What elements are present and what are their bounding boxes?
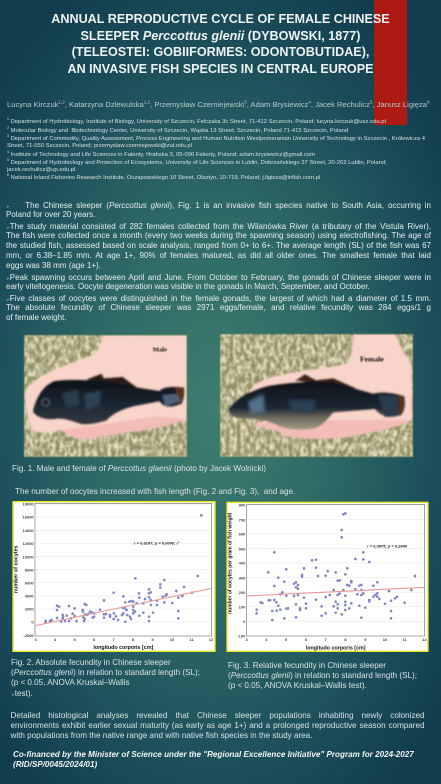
axis tick labels: -100 [237, 634, 246, 639]
conclusion text: Detailed histological analyses revealed that Chinese sleeper populations inhabiting newly colonized [10, 711, 424, 720]
chart: absolute fecundity scatter: 10 [170, 637, 175, 642]
red accent bar [374, 0, 407, 125]
funding note: Co-financed by the Minister of Science under the "Regional Excellence Initiative" Program for 2024-2027 [13, 750, 414, 759]
paragraph: spawning: ➢Peak spawning occurs between April and June. From October to February, the gonads of Chinese sleeper were in [6, 272, 431, 282]
title: (TELEOSTEI: GOBIIFORMES: ODONTOBUTIDAE), [72, 45, 369, 59]
chart: absolute fecundity scatter: 7 [113, 637, 116, 642]
caption: figure 3 [228, 661, 417, 690]
regression line [247, 587, 425, 596]
funding note [13, 750, 414, 769]
photo: male fish [23, 334, 188, 458]
chart: absolute fecundity scatter: 9 [152, 637, 155, 642]
axis tick labels: 700 [239, 517, 246, 522]
title: ANNUAL REPRODUCTIVE CYCLE OF FEMALE CHINESE [51, 12, 390, 26]
regression line [35, 588, 212, 626]
title: AN INVASIVE FISH SPECIES IN CENTRAL EUROPE [67, 62, 374, 76]
chart: relative fecundity scatter: 8 [344, 637, 347, 642]
axis tick labels: 4000 [25, 594, 34, 599]
axis titles: longitudo corporis [cm] [306, 646, 366, 652]
axis tick labels [237, 503, 246, 639]
chart: relative fecundity scatter: 11 [403, 637, 408, 642]
paragraph: oocytes [6, 294, 431, 322]
chart: relative fecundity scatter: number of oocytes per gram of fish weight [228, 512, 234, 614]
paragraph: study material: ➢The study material consisted of 282 females collected from the Wilanówka River (a tributary of the Vistula River). [6, 222, 431, 230]
axis tick labels: 8000 [25, 567, 34, 572]
affiliations: 6 National Inland Fisheries Research Institute, Oczapowskiego 10 Street, Olsztyn, 10-719, Poland; j.ligieza@infish.com.pl [7, 173, 320, 180]
chart: absolute fecundity scatter: 3 [35, 637, 38, 642]
paragraph: study material [6, 222, 431, 270]
axis tick labels: 2000 [25, 607, 34, 612]
caption: figure 3: Fig. 3. Relative fecundity in Chinese sleeper [228, 661, 386, 670]
affiliations: 2 Molecular Biology and Biotechnology Center, University of Szczecin, Wąska 13 Street, Szczecin, Poland 71-415 Szczecin, Poland [7, 126, 348, 134]
affiliations: jacek.rechulicz@up.edu.pl [7, 166, 75, 172]
caption: figure 2: (p < 0.05, ANOVA Kruskal–Wallis [11, 678, 130, 686]
photo: female fish: Female [360, 354, 384, 363]
photo: female fish [220, 333, 414, 458]
chart: relative fecundity scatter: 3 [246, 637, 249, 642]
caption: figure 1: Fig. 1. Male and female of Perccottus glaenii (photo by Jacek Wolnicki) [12, 464, 266, 473]
paragraph: oocytes: The absolute fecundity of Chinese sleeper was 2971 eggs/female, and relative fecundity was 284 eggs/1 g [6, 303, 431, 312]
axis tick labels: 600 [239, 532, 246, 537]
chart: absolute fecundity scatter: 12 [209, 637, 214, 642]
caption: figure 2: ➢test). [11, 689, 33, 698]
paragraph: oocytes: of female weight. [6, 313, 66, 322]
axis titles: longitudo corporis [cm] [93, 645, 153, 651]
chart: absolute fecundity scatter: number of oocytes [13, 545, 19, 593]
text: oocytes increased with length: The number of oocytes increased with fish length (Fig. 2 and Fig. 3), and age. [15, 487, 295, 496]
paragraph: introduction: Poland for over 20 years. [6, 210, 95, 219]
paragraph: spawning: early vitellogenesis. Oocyte degeneration was visible in the gonads in March, September, and October. [6, 282, 370, 291]
authors: Lucyna Kirczuk1,2, Katarzyna Dzlewulska1,2, Przemysław Czerniejewski3, Adam Brysiewicz4, Jacek Rechulicz5, Janusz Ligięza6 [7, 99, 430, 109]
axis tick labels: 14000 [23, 528, 34, 533]
axis tick labels: 0 [243, 619, 246, 624]
caption: figure 3: (Perccottus glenii) in relation to standard length (SL); [228, 671, 417, 680]
plot grid [247, 505, 425, 621]
funding note: (RID/SP/0045/2024/01) [13, 760, 97, 769]
chart: relative fecundity scatter: 5 [285, 637, 288, 642]
affiliations: 4 Institute of Technology and Life Sciences in Falenty, Hrabska 3, 05-090 Falenty, Poland; adam.brysiewicz@gmail.com [7, 150, 315, 158]
axis tick labels: 12000 [23, 541, 34, 546]
body text [6, 200, 431, 322]
axis tick labels: -2000 [23, 633, 34, 638]
axis tick labels: 6000 [25, 580, 34, 585]
caption: figure 3: (p < 0.05, ANOVA Kruskal–Wallis test). [228, 680, 367, 690]
photo: male fish: Male [153, 346, 167, 353]
axis tick labels: 400 [239, 561, 246, 566]
axis tick labels: 16000 [23, 515, 34, 520]
title [51, 12, 390, 76]
affiliations: 1 Department of Hydrobiology, Institute of Biology, University of Szczecin, Felczaka 3c Street, 71-412 Szczecin, Poland; lucyna.kirczuk@usz.edu.pl [7, 117, 386, 125]
caption: figure 2 [11, 658, 200, 698]
caption: figure 2: Fig. 2. Absolute fecundity in Chinese sleeper [11, 658, 171, 667]
paragraph: study material: The fish were collected once a month (every two weeks during the spawning season) using electrofishing. The age of [6, 231, 431, 240]
axis tick labels: 500 [239, 546, 246, 551]
axis tick labels: 200 [239, 590, 246, 595]
axis tick labels: 10000 [23, 554, 34, 559]
axis tick labels: 100 [239, 604, 246, 609]
caption: figure 2: (Perccottus glenii) in relation to standard length (SL); [11, 668, 200, 677]
statistics note: r = 0,0975; p = 0,2640 [367, 543, 408, 548]
axis tick labels: 0 [31, 620, 34, 625]
chart: relative fecundity scatter: 9 [364, 637, 367, 642]
chart: relative fecundity scatter: 12 [422, 637, 427, 642]
affiliations: 5 Department of Hydrobiology and Protection of Ecosystems, University of Life Sciences in Lublin, Dobrzańskiego 37 Street, 20-262 Lublin, Poland; [7, 158, 387, 166]
chart: relative fecundity scatter [226, 502, 429, 652]
affiliations [6, 117, 425, 180]
data points [46, 515, 201, 622]
chart: relative fecundity scatter: 6 [305, 637, 308, 642]
axis tick labels: 18000 [23, 502, 34, 507]
chart: relative fecundity scatter: 7 [325, 637, 328, 642]
chart: absolute fecundity scatter [12, 501, 216, 652]
chart: absolute fecundity scatter: 8 [132, 637, 135, 642]
statistics note: r = 0,6107; p = 0,0000; r² [134, 540, 180, 545]
chart: absolute fecundity scatter: 6 [93, 637, 96, 642]
conclusion text: environments exhibit earlier sexual maturity (as early as age 1+) and a prolonged reproductive season compared [10, 721, 424, 730]
conclusion text [10, 711, 424, 740]
chart: absolute fecundity scatter: 11 [190, 637, 195, 642]
affiliations: Street, 71-550 Szczecin, Poland; przemyslaw.czerniejewski@zut.edu.pl [7, 143, 192, 149]
paragraph: study material: mm, or 6.38–1.85 mm. At age 1+, 90% of females matured, as did all older ones. The smallest female that laid [6, 251, 431, 260]
title: SLEEPER Perccottus glenii (DYBOWSKI, 1877) [81, 29, 360, 43]
axis tick labels: 300 [239, 575, 246, 580]
paragraph: introduction: ➢ The Chinese sleeper (Perccottus glenii), Fig. 1 is an invasive fish species native to South Asia, occurring in [6, 200, 431, 210]
paragraph: introduction [6, 200, 431, 219]
paragraph: study material: eggs was 38 mm (age 1+). [6, 260, 101, 270]
chart: absolute fecundity scatter: 5 [74, 637, 77, 642]
plot grid [35, 504, 212, 622]
chart: relative fecundity scatter: 10 [383, 637, 388, 642]
paragraph: study material: the studied fish, assessed based on scale analysis, ranged from 0+ to 6+. The average length (SL) of the fish was 67 [6, 241, 431, 250]
conclusion text: with populations from the native range and with native fish species in the study area. [10, 730, 312, 740]
axis tick labels [23, 502, 34, 638]
axis tick labels: 800 [239, 503, 246, 508]
chart: absolute fecundity scatter: 4 [54, 637, 57, 642]
paragraph: oocytes: ➢Five classes of oocytes were distinguished in the female gonads, the largest of which had a diameter of 1.5 mm. [6, 294, 431, 302]
chart: relative fecundity scatter: 4 [265, 637, 268, 642]
paragraph: spawning [6, 272, 431, 291]
affiliations: 3 Department of Commodity, Quality Assessment, Process Engineering and Human Nutrition Westpomeranian University of Technology in Szczecin , Królewicza 4 [7, 134, 425, 142]
data points [257, 513, 415, 620]
